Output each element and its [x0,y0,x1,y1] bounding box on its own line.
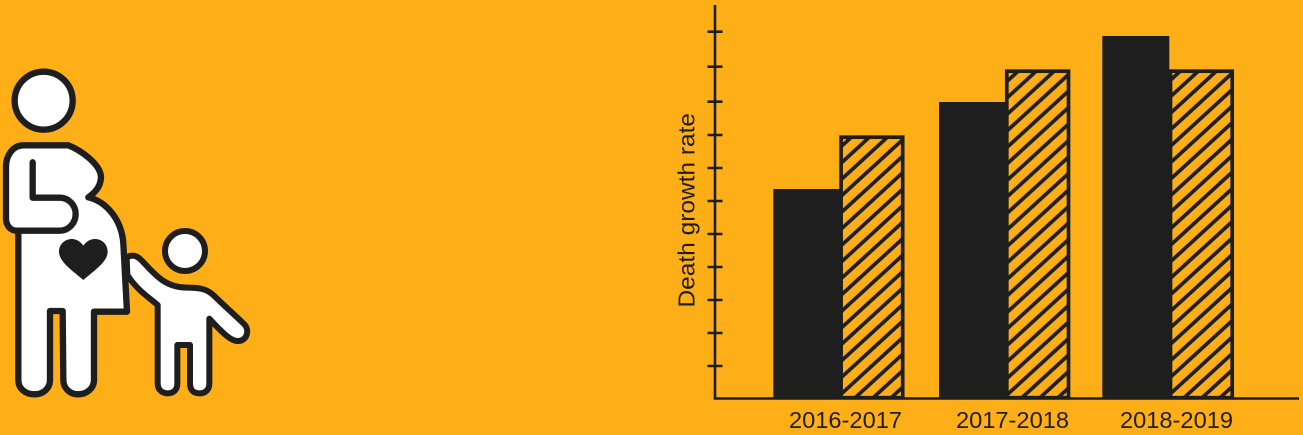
bar chart [673,5,1299,433]
bar: 2016-2017 solid [773,189,840,399]
icon: woman body [6,145,127,394]
bar: 2017-2018 solid [939,102,1006,399]
bar: 2018-2019 solid [1102,36,1169,399]
icon: child body [127,256,247,393]
bar: 2016-2017 hatched [841,137,903,398]
x axis [714,397,1299,400]
icon: heart [59,239,108,280]
y axis label: Death growth rate [673,113,699,308]
icon: child head [165,231,205,271]
x label 2017-2018: 2017-2018 [956,407,1069,433]
icon: woman arm [17,162,76,231]
y axis with ticks [708,5,722,400]
icon: pregnant woman holding child's hand [6,72,247,394]
bar: 2018-2019 hatched [1170,71,1232,398]
x label 2016-2017: 2016-2017 [789,407,902,433]
bar: 2017-2018 hatched [1007,71,1068,398]
icon: woman head [15,72,73,130]
x label 2018-2019: 2018-2019 [1120,407,1233,433]
